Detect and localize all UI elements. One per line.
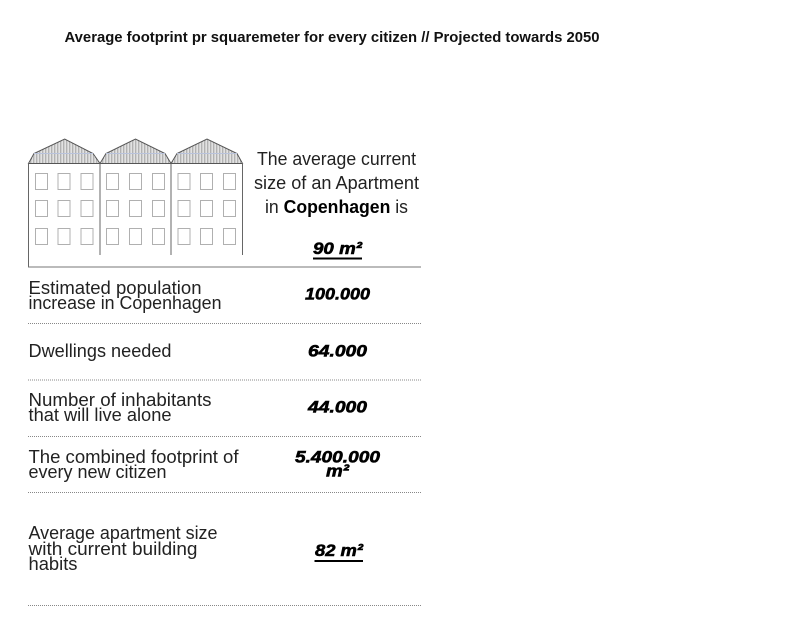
row: dwellings needed: Dwellings needed [28,341,172,361]
row: dwellings needed: 64.000 [308,342,368,360]
row: inhabitants living alone: Number of inhabitants [28,390,212,410]
roof: building 3 [171,139,242,164]
roof: building 2 [100,139,171,164]
row: population increase [28,278,371,313]
row: average apartment size: habits [28,554,78,574]
row: combined footprint [28,447,381,482]
row: average apartment size: 82 m² [315,541,364,560]
row: average apartment size: Average apartment size [28,523,218,543]
value: 90 m²: 90 m² [313,239,363,258]
text block: current apartment size [254,149,419,217]
icon: row of three apartment buildings [28,139,242,267]
header rule [28,266,421,268]
row: inhabitants living alone: that will live alone [28,405,172,425]
row: dwellings needed [28,341,368,361]
row: average apartment size: with current building [27,539,198,559]
row: population increase: 100.000 [305,284,371,304]
row: average apartment size [27,523,364,574]
windows [36,174,236,244]
row: population increase: increase in Copenhagen [28,293,222,313]
row: inhabitants living alone [28,390,368,425]
title: Average footprint pr squaremeter for every citizen // Projected towards 2050 [64,29,600,46]
text block: current apartment size: The average current [257,149,416,169]
row: combined footprint: The combined footprint of [28,447,240,467]
row: combined footprint: 5.400.000 [295,448,381,466]
text block: current apartment size: size of an Apartment [254,173,419,193]
roof: building 1 [28,139,100,164]
text block: current apartment size: in Copenhagen is [265,197,408,217]
row: combined footprint: every new citizen [28,462,166,482]
row: combined footprint: m² [326,462,350,480]
row: inhabitants living alone: 44.000 [307,398,368,416]
walls [28,164,242,267]
row: population increase: Estimated population [28,278,202,298]
